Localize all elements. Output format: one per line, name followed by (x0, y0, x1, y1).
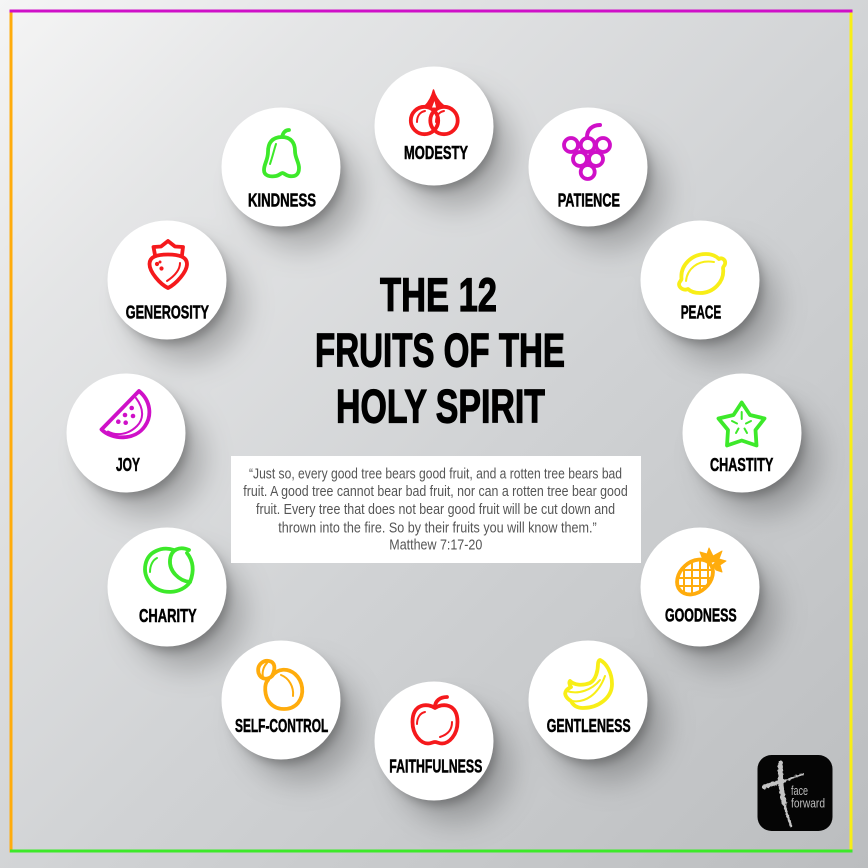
fruit badge: patience (528, 108, 648, 226)
icon: peach (145, 548, 193, 592)
scripture quote box: fruit. A good tree cannot bear bad fruit, nor can a rotten tree bear good (243, 484, 628, 500)
fruit badge: modesty (374, 66, 494, 186)
fruit badge: goodness (640, 528, 760, 646)
logo: face forward: forward (791, 796, 825, 811)
fruit badge: generosity (108, 220, 226, 340)
fruit badge: charity (108, 528, 226, 646)
label: PEACE (681, 302, 721, 322)
icon: apricot (258, 661, 302, 709)
label: MODESTY (404, 143, 468, 163)
label: SELF-CONTROL (235, 716, 328, 736)
fruit badge: faithfulness (374, 682, 494, 800)
icon: cross (764, 763, 803, 826)
title: FRUITS OF THE (315, 325, 565, 378)
icon: pineapple (675, 548, 726, 596)
label: FAITHFULNESS (389, 757, 482, 777)
fruit badge: self-control (222, 640, 340, 760)
label: KINDNESS (248, 191, 316, 211)
icon: bananas (565, 660, 612, 708)
icon: grapes (564, 125, 610, 179)
logo: face forward (758, 755, 832, 831)
label: GOODNESS (665, 606, 737, 626)
scripture quote box: “Just so, every good tree bears good fruit, and a rotten tree bears bad (249, 466, 622, 482)
label: GENTLENESS (547, 716, 631, 736)
icon: strawberry (150, 241, 187, 288)
logo wordmark: face (791, 783, 808, 798)
fruit badge: gentleness (528, 640, 648, 760)
title: THE 12 (380, 269, 497, 322)
icon: pear (264, 130, 299, 176)
label: GENEROSITY (126, 302, 209, 322)
label: CHASTITY (710, 455, 773, 475)
fruit badge: kindness (222, 108, 340, 226)
label: PATIENCE (558, 191, 620, 211)
title: HOLY SPIRIT (336, 380, 545, 433)
scripture quote box (231, 456, 641, 563)
scripture quote box: fruit. Every tree that does not bear good fruit will be cut down and (256, 502, 615, 518)
scripture quote box: Matthew 7:17-20 (389, 537, 482, 553)
fruit badge: peace (640, 220, 760, 340)
label: JOY (116, 455, 140, 475)
circle drop shadows (74, 76, 819, 822)
icon: lemon (679, 254, 725, 293)
icon: star fruit (718, 402, 764, 446)
scripture quote box: thrown into the fire. So by their fruits you will know them.” (278, 521, 597, 537)
icon: watermelon (102, 391, 149, 437)
fruit badge: joy (66, 374, 186, 492)
icon: apple (412, 697, 458, 744)
title (315, 269, 565, 433)
label: CHARITY (139, 606, 197, 626)
fruit badge: chastity (682, 374, 802, 492)
icon: cherries (411, 90, 458, 134)
